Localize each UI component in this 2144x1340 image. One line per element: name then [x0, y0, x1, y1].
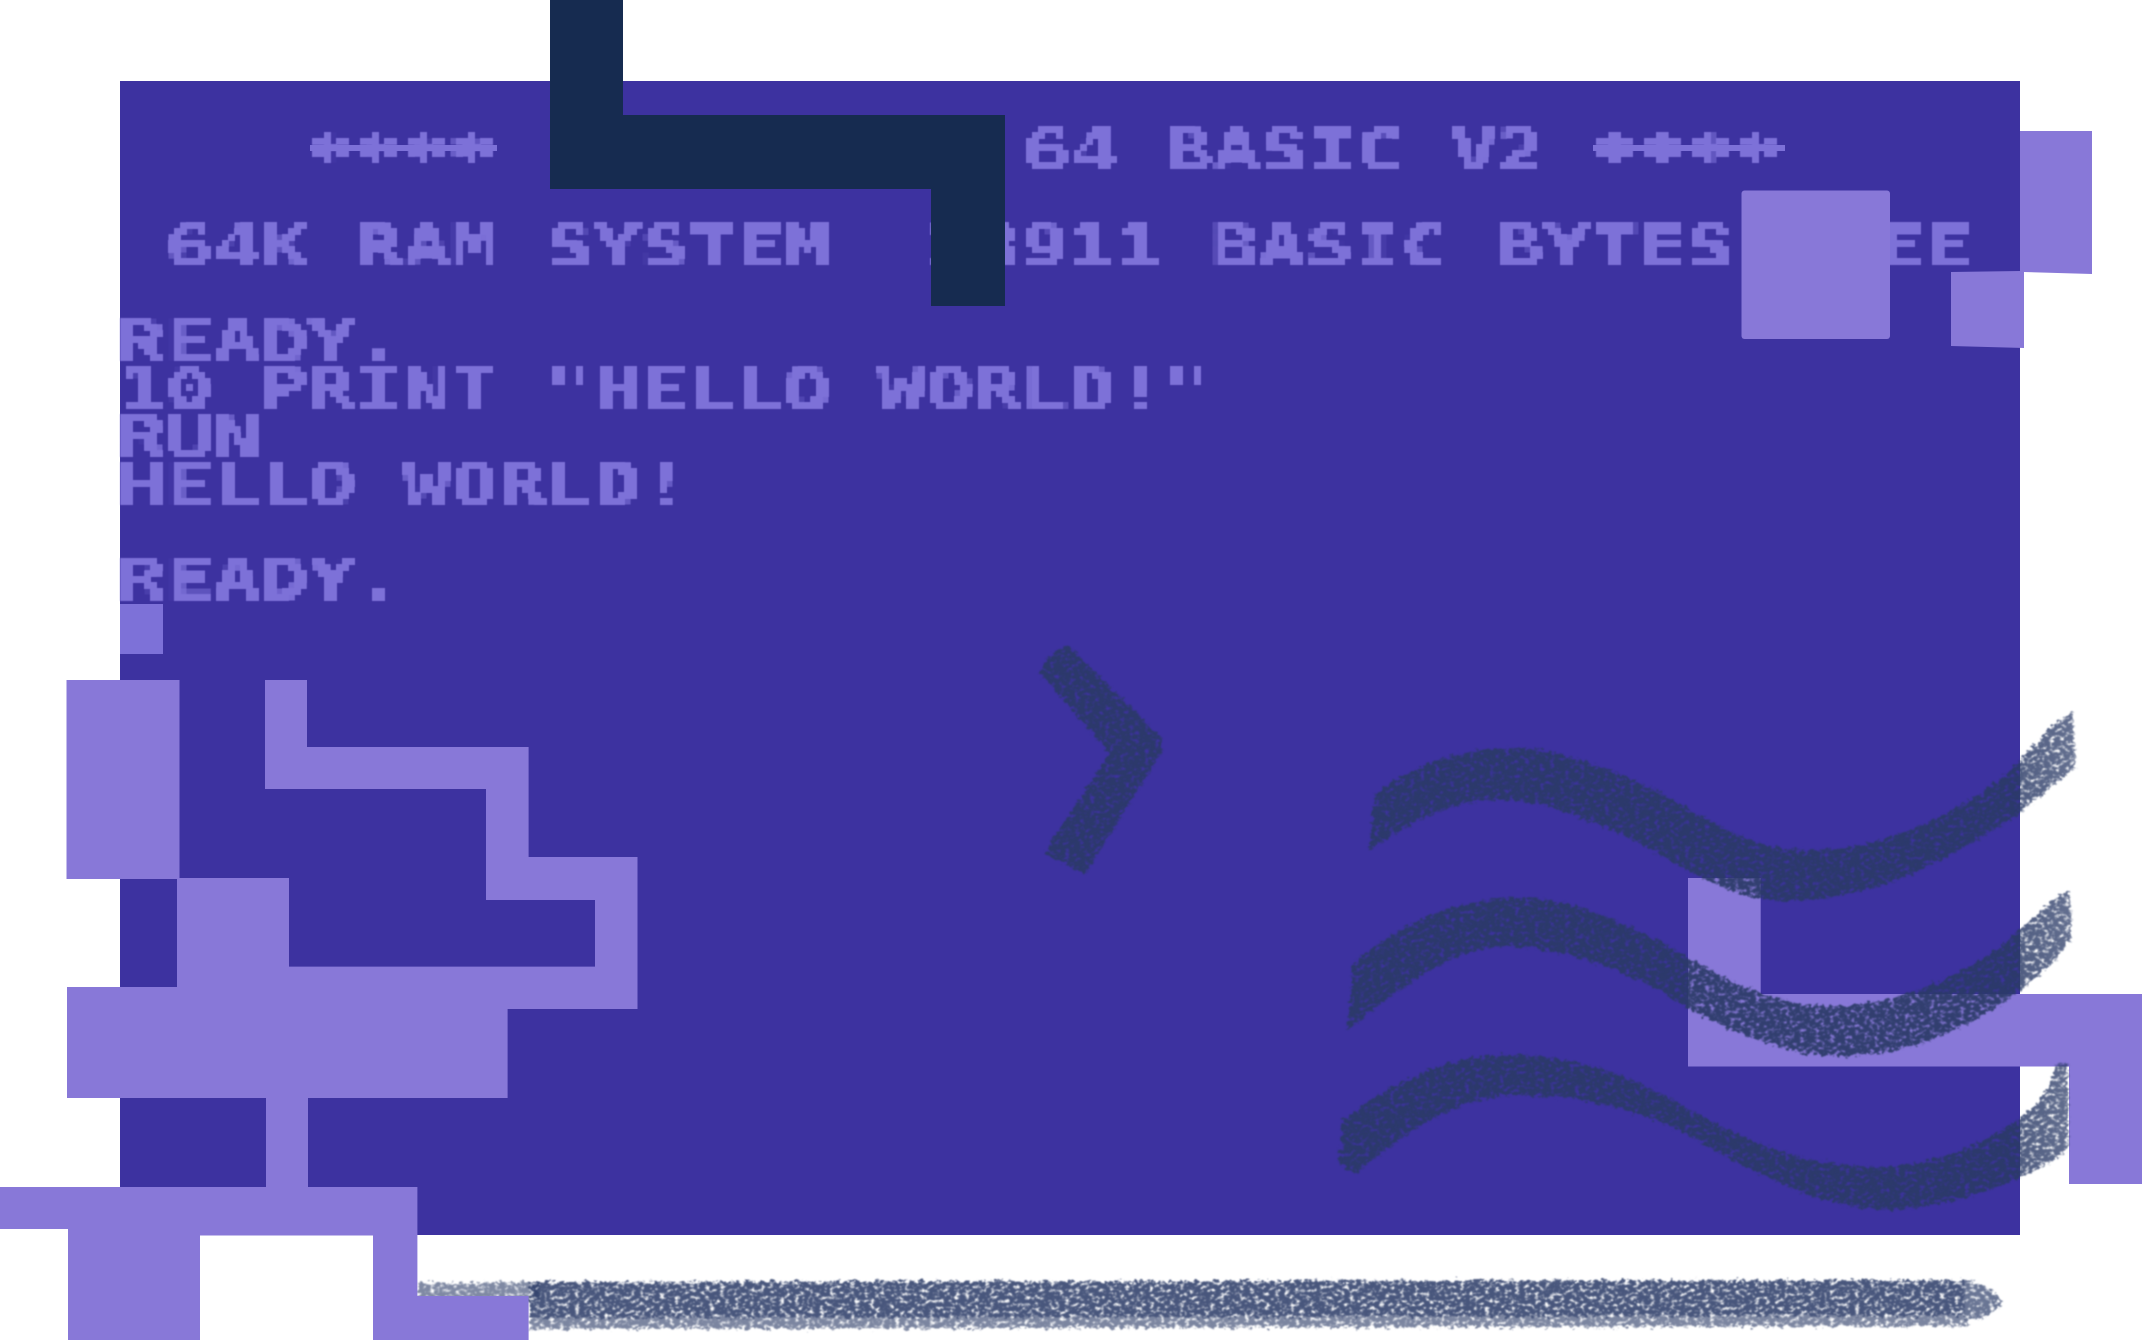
text: C64 boot screen — [118, 118, 1971, 613]
shape: purple square top right — [1742, 190, 1890, 339]
shape: purple rectangle upper left block — [66, 680, 180, 879]
shape: brush stroke along bottom — [418, 1280, 2003, 1329]
shape: faint start of brush stroke — [418, 1282, 540, 1300]
shape: main body of brush stroke — [530, 1280, 1965, 1318]
text: program output: HELLO WORLD! — [118, 452, 688, 518]
icon: brush chevron prompt — [1040, 645, 1162, 874]
text: run command: RUN — [118, 404, 261, 471]
text: right stars of banner: **** — [1591, 118, 1781, 200]
text: memory line: 64K RAM SYSTEM 38911 BASIC BYTES FREE — [166, 214, 1971, 280]
text: print command: 10 PRINT "HELLO WORLD!" — [118, 357, 1211, 423]
text: ready prompt: READY. — [118, 309, 403, 376]
text: second ready prompt: READY. — [118, 547, 403, 613]
shape: faint lower edge of brush stroke — [530, 1316, 1970, 1329]
shape: dark navy stepped line — [550, 0, 1005, 306]
shape: purple pixel stair and blocks — [0, 680, 638, 1340]
shape: faint tip of brush stroke — [1965, 1280, 2003, 1321]
shape: purple stepped blocks top right — [1951, 131, 2092, 348]
panel: blue C64 screen — [120, 81, 2020, 1235]
text: left stars of banner: **** — [306, 118, 496, 200]
icon: three brush waves — [1339, 712, 2076, 1209]
shape: top wave — [1369, 712, 2076, 901]
shape: middle wave — [1347, 891, 2072, 1056]
shape: bottom wave — [1339, 1055, 2069, 1209]
text: banner line: COMMODORE 64 BASIC V2 — [548, 118, 1545, 184]
icon: blinking cursor block — [120, 604, 163, 654]
shape: purple L shape lower right — [1688, 878, 2142, 1184]
